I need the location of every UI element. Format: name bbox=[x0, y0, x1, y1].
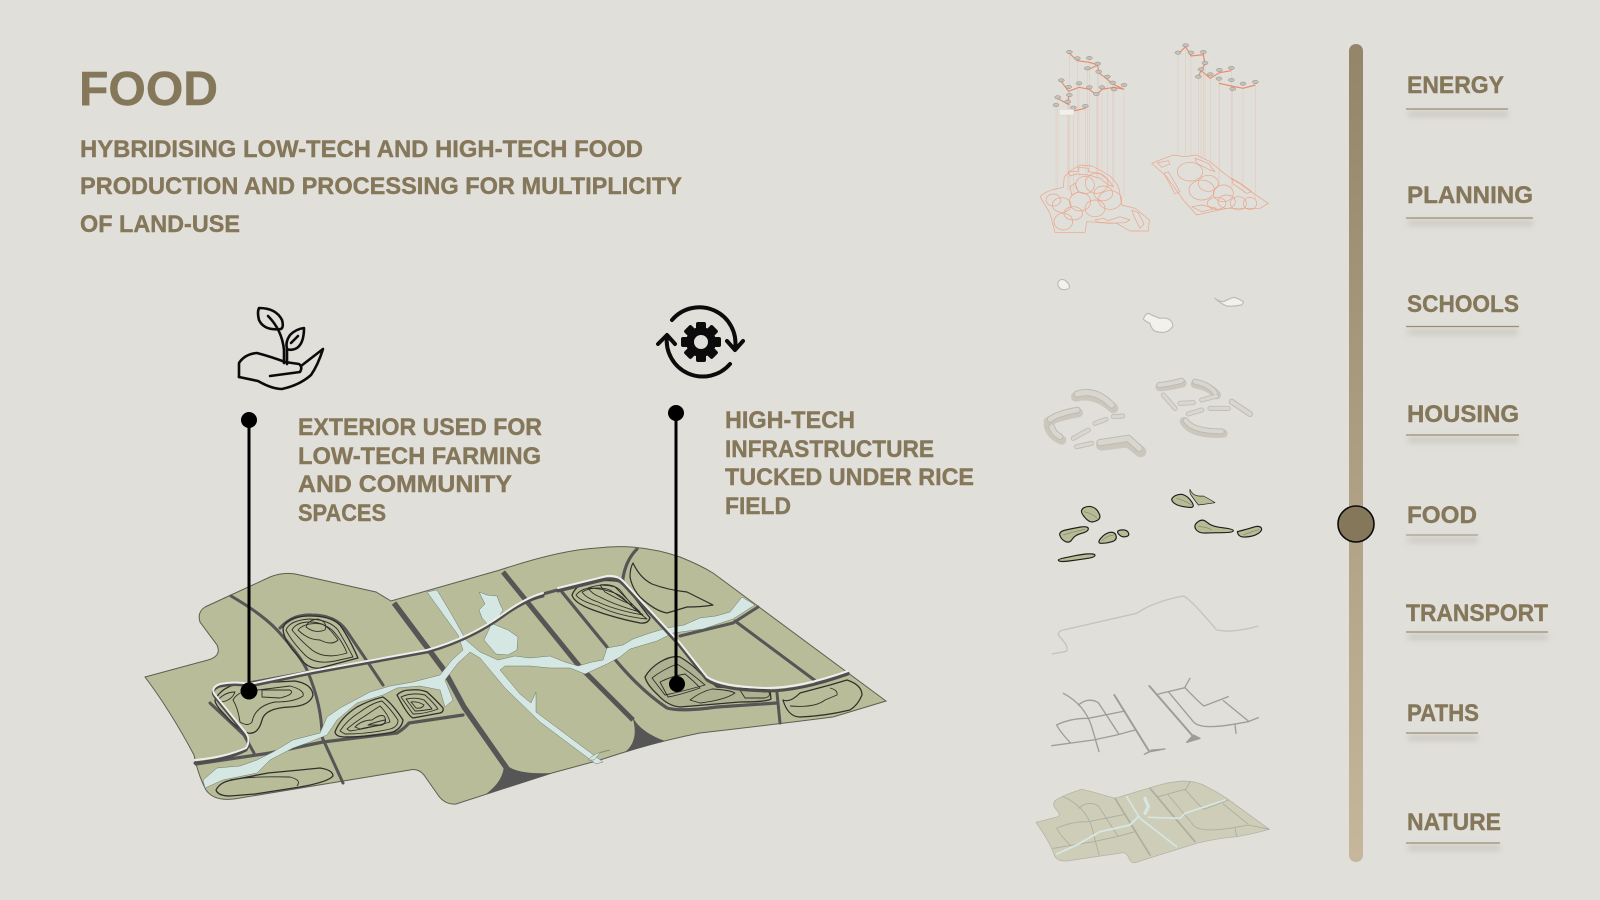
hill: central small bbox=[397, 690, 443, 718]
label: schools bbox=[1406, 291, 1519, 335]
label: food: FOOD bbox=[1407, 502, 1477, 529]
subtitle: HYBRIDISING LOW-TECH AND HIGH-TECH FOOD bbox=[80, 136, 643, 163]
label: transport: TRANSPORT bbox=[1406, 600, 1548, 627]
label: energy: ENERGY bbox=[1407, 72, 1504, 99]
layer thumbnail: nature bbox=[1036, 781, 1269, 863]
label: transport bbox=[1406, 600, 1548, 640]
callout text: low-tech farming: LOW-TECH FARMING bbox=[298, 443, 541, 470]
callout text: high-tech infrastructure bbox=[725, 407, 974, 520]
callout text: high-tech infrastructure: INFRASTRUCTURE bbox=[725, 436, 934, 463]
pin line: low-tech bbox=[240, 412, 258, 700]
callout text: high-tech infrastructure: FIELD bbox=[725, 493, 791, 520]
hill: central bbox=[335, 697, 403, 737]
layer thumbnail: paths bbox=[1052, 678, 1258, 754]
label: food bbox=[1406, 502, 1478, 543]
callout text: low-tech farming: AND COMMUNITY bbox=[298, 471, 512, 498]
river bbox=[203, 590, 755, 788]
main site map bbox=[145, 547, 886, 804]
road flares bbox=[486, 716, 665, 794]
hill: north-west bbox=[283, 616, 358, 668]
label: planning: PLANNING bbox=[1407, 182, 1533, 209]
label: housing bbox=[1406, 401, 1519, 443]
layer thumbnail: food bbox=[1058, 489, 1262, 561]
icon: hand holding seedling bbox=[239, 308, 323, 389]
callout text: low-tech farming: EXTERIOR USED FOR bbox=[298, 414, 542, 441]
hill: south-east with pin bbox=[645, 657, 771, 707]
layer slider track bbox=[1349, 44, 1363, 862]
slider handle bbox=[1338, 506, 1374, 542]
hill: north-east bbox=[572, 580, 650, 623]
hill: south-west bbox=[216, 768, 333, 796]
layer thumbnail: housing bbox=[1048, 381, 1250, 452]
label: paths bbox=[1406, 700, 1479, 741]
hill: east bbox=[783, 680, 862, 717]
label: nature bbox=[1406, 809, 1501, 851]
road with white edge bbox=[195, 576, 848, 763]
layer thumbnail: schools bbox=[1058, 279, 1243, 332]
hills with contour lines bbox=[215, 563, 862, 796]
subtitle: PRODUCTION AND PROCESSING FOR MULTIPLICITY bbox=[80, 173, 682, 200]
title: FOOD bbox=[79, 63, 218, 116]
callout text: high-tech infrastructure: HIGH-TECH bbox=[725, 407, 855, 434]
pin line: high-tech bbox=[668, 405, 685, 692]
hill: leaf shape bbox=[630, 563, 713, 613]
label: schools: SCHOOLS bbox=[1407, 291, 1519, 318]
subtitle bbox=[80, 136, 682, 238]
label: housing: HOUSING bbox=[1407, 401, 1519, 428]
label: energy bbox=[1406, 72, 1508, 117]
layer thumbnail: transport bbox=[1052, 596, 1258, 654]
label: paths: PATHS bbox=[1407, 700, 1479, 727]
callout text: high-tech infrastructure: TUCKED UNDER RICE bbox=[725, 464, 974, 491]
icon: gear with cycle arrows bbox=[658, 307, 743, 377]
hill: west with pin bbox=[215, 681, 313, 733]
label: nature: NATURE bbox=[1407, 809, 1501, 836]
subtitle: OF LAND-USE bbox=[80, 211, 240, 238]
label: planning bbox=[1406, 182, 1533, 226]
layer thumbnail: energy bbox=[1040, 44, 1268, 232]
callout text: low-tech farming bbox=[298, 414, 542, 527]
callout text: low-tech farming: SPACES bbox=[298, 500, 386, 527]
